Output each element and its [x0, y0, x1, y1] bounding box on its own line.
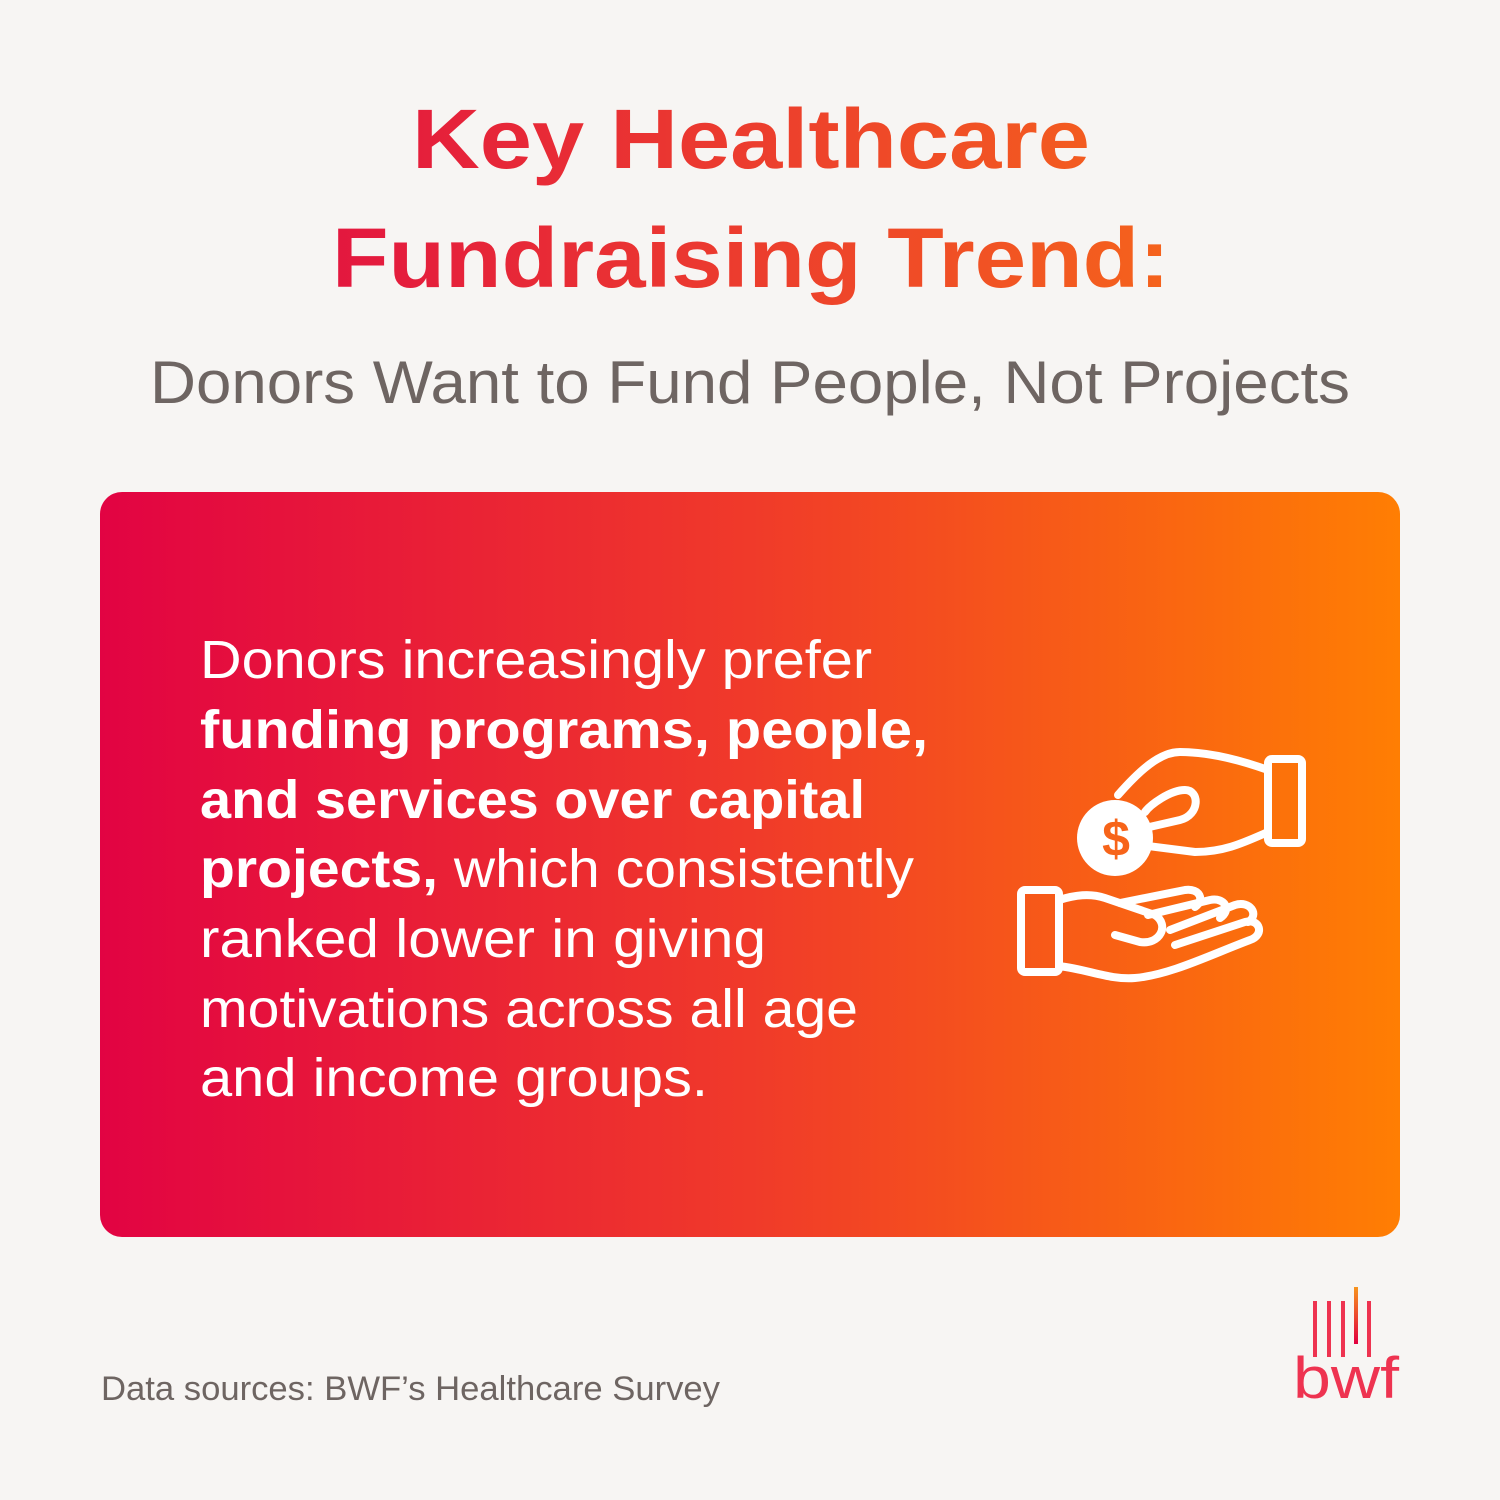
- logo: bwf: bwf: [1293, 1346, 1400, 1411]
- icon: hands giving coin: [1021, 752, 1302, 978]
- text block: body: and income groups.: [200, 1048, 708, 1108]
- panel: main card: [100, 492, 1400, 1237]
- subtitle: Donors Want to Fund People, Not Projects: [150, 349, 1350, 416]
- text block: body: [200, 630, 928, 1108]
- title: Fundraising Trend:: [332, 211, 1170, 305]
- text block: body: and services over capital: [200, 770, 865, 830]
- title: [332, 92, 1170, 305]
- footer: data source: Data sources: BWF’s Healthcare Survey: [101, 1370, 720, 1408]
- text block: body: projects, which consistently: [200, 839, 914, 899]
- text block: body: motivations across all age: [200, 979, 858, 1039]
- title: Key Healthcare: [412, 92, 1090, 186]
- logo: bwf: [1293, 1287, 1400, 1411]
- icon: hands giving coin: $: [1102, 811, 1130, 867]
- text block: body: funding programs, people,: [200, 700, 928, 760]
- text block: body: ranked lower in giving: [200, 909, 766, 969]
- text block: body: Donors increasingly prefer: [200, 630, 872, 690]
